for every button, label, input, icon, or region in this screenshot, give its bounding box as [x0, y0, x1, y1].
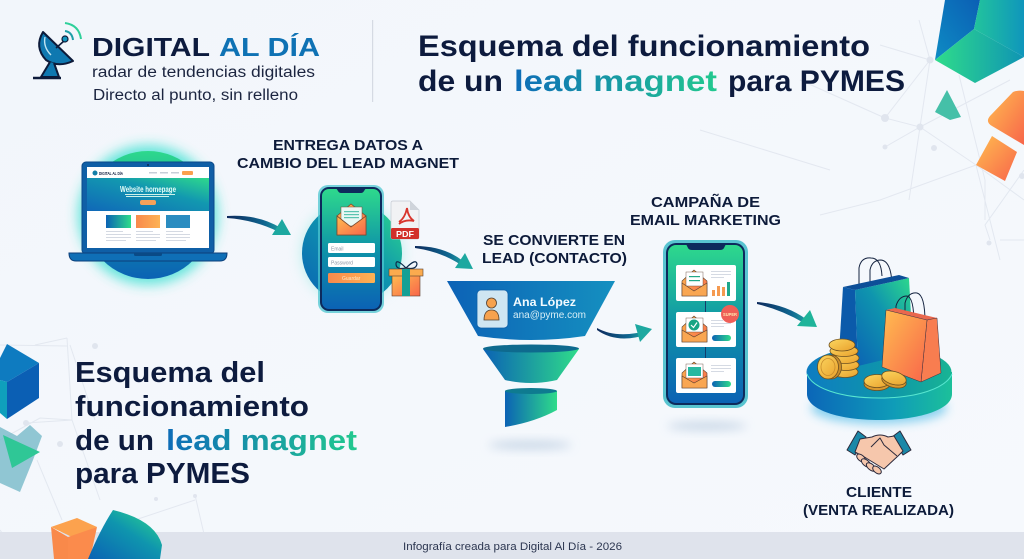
main title: lead magnet — [514, 65, 717, 98]
decoration: bottom teal leaf — [88, 510, 162, 559]
logo wordmark — [92, 32, 320, 62]
step 4 heading: EMAIL MARKETING — [630, 212, 781, 229]
super badge: SUPER — [723, 312, 738, 317]
arrow 2 — [415, 246, 473, 269]
main title: de un — [418, 65, 503, 98]
client label: (VENTA REALIZADA) — [803, 502, 954, 519]
icon: satellite dish — [33, 23, 81, 78]
arrow 3 — [597, 324, 652, 342]
lead card: Ana López — [513, 297, 576, 309]
phone circle backdrop — [301, 202, 403, 304]
step 4 heading: CAMPAÑA DE — [651, 193, 760, 211]
blue shopping bag — [839, 258, 913, 366]
form fields — [328, 243, 375, 283]
funnel bottom section — [505, 388, 557, 427]
logo block — [33, 23, 320, 104]
icon: PDF file: PDF — [396, 229, 414, 239]
main title — [418, 30, 905, 98]
step 2 heading: ENTREGA DATOS A — [273, 137, 423, 154]
icon: handshake — [847, 431, 911, 476]
main title: para PYMES — [728, 65, 905, 98]
step 4: phone with email campaign — [663, 240, 748, 430]
email card 2 — [676, 305, 739, 347]
laptop website screen: Website homepage — [120, 185, 176, 194]
form fields: Guardar — [342, 276, 361, 282]
secondary title: funcionamiento — [75, 391, 309, 423]
logo wordmark: AL DÍA — [219, 32, 320, 62]
email card 3 — [676, 358, 736, 393]
logo wordmark: DIGITAL — [92, 32, 210, 62]
laptop body — [69, 162, 227, 261]
decoration: bottom orange cube — [51, 518, 97, 559]
arrow 4 — [757, 302, 817, 327]
coin stack — [818, 339, 859, 379]
secondary title: lead magnet — [166, 425, 357, 457]
lead card — [477, 290, 586, 328]
decoration: translucent teal shards — [0, 425, 42, 492]
secondary title — [75, 357, 357, 490]
secondary title: Esquema del — [75, 357, 265, 389]
orange shopping bag — [882, 293, 941, 382]
step 2 heading: CAMBIO DEL LEAD MAGNET — [237, 155, 459, 172]
decoration: teal shard — [935, 90, 961, 120]
footer credit text: Infografía creada para Digital Al Día - 2026 — [403, 541, 622, 553]
platform — [806, 346, 952, 424]
step 4 heading — [630, 193, 781, 229]
laptop website screen — [87, 169, 209, 241]
decoration: top right cube — [935, 0, 1024, 83]
form fields: Password — [331, 260, 353, 266]
email card 1 — [676, 265, 736, 301]
funnel middle section — [483, 344, 579, 383]
funnel top section — [447, 281, 615, 340]
phone shadow — [667, 422, 747, 430]
phone body — [318, 185, 384, 313]
decoration: orange shapes right — [976, 91, 1024, 181]
step 3 heading: LEAD (CONTACTO) — [482, 250, 627, 267]
laptop website screen: DIGITAL AL DÍA — [99, 169, 124, 176]
icon: gift box — [389, 262, 423, 296]
decoration: left blue cube — [0, 344, 39, 419]
step 3 heading — [482, 232, 627, 267]
footer band — [0, 532, 1024, 559]
icon: open envelope — [337, 204, 366, 235]
logo slogan: Directo al punto, sin relleno — [93, 87, 298, 104]
step 5: shopping platform — [806, 258, 952, 424]
icon: PDF file — [391, 201, 419, 239]
step 3: funnel — [447, 281, 615, 449]
step 2 heading — [237, 137, 459, 172]
main title: Esquema del funcionamiento — [418, 30, 870, 63]
flat coins — [864, 368, 908, 391]
arrow 1 — [227, 216, 291, 235]
lead card: ana@pyme.com — [513, 310, 586, 321]
secondary title: de un — [75, 425, 154, 457]
logo tagline: radar de tendencias digitales — [92, 64, 315, 81]
secondary title: para PYMES — [75, 458, 250, 490]
form fields: Email — [331, 246, 344, 252]
step 3 heading: SE CONVIERTE EN — [483, 232, 625, 249]
step 2: phone with form — [301, 185, 403, 313]
step 1: laptop website — [69, 145, 227, 285]
phone frame — [663, 240, 748, 408]
funnel shadow — [488, 441, 572, 449]
client label: CLIENTE — [846, 484, 912, 501]
laptop glow circle — [78, 145, 218, 285]
client label — [803, 484, 954, 519]
